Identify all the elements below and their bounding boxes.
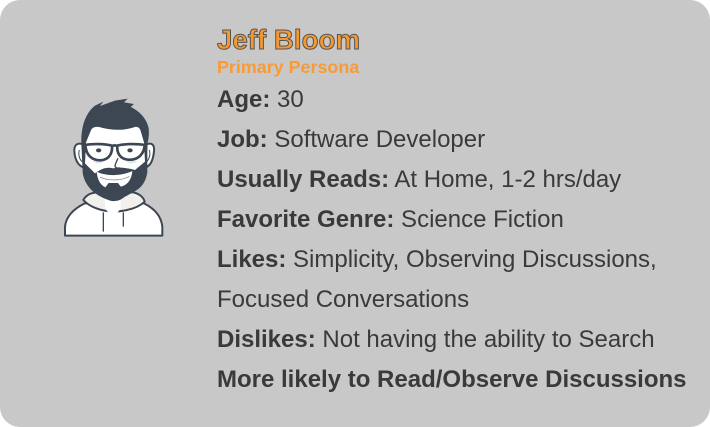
drawstrings xyxy=(103,212,123,232)
text: behavior summary: More likely to Read/Observe Discussions xyxy=(217,366,687,393)
text: dislikes: Dislikes: Not having the ability to Search xyxy=(217,326,655,353)
text: age: Age: 30 xyxy=(217,86,304,113)
nose xyxy=(115,158,120,168)
ears xyxy=(74,144,154,168)
glasses xyxy=(85,144,145,160)
icon: bearded man avatar xyxy=(64,98,164,237)
text: job: Job: Software Developer xyxy=(217,126,485,153)
hood collar xyxy=(83,192,145,212)
subtitle: persona type: Primary Persona xyxy=(217,57,359,77)
text: favorite genre: Favorite Genre: Science Fiction xyxy=(217,206,564,233)
text: usually reads: Usually Reads: At Home, 1-2 hrs/day xyxy=(217,166,621,193)
text: likes: Likes: Simplicity, Observing Discussions, xyxy=(217,246,657,273)
hair and beard xyxy=(81,99,149,201)
eyes xyxy=(96,148,101,152)
hood neck xyxy=(105,197,121,214)
cheek shading xyxy=(93,160,137,163)
title: name: Jeff Bloom xyxy=(217,24,360,55)
mouth xyxy=(97,171,132,187)
face xyxy=(85,127,145,173)
hoodie body xyxy=(65,203,162,236)
text: likes continued: Focused Conversations xyxy=(217,286,469,313)
